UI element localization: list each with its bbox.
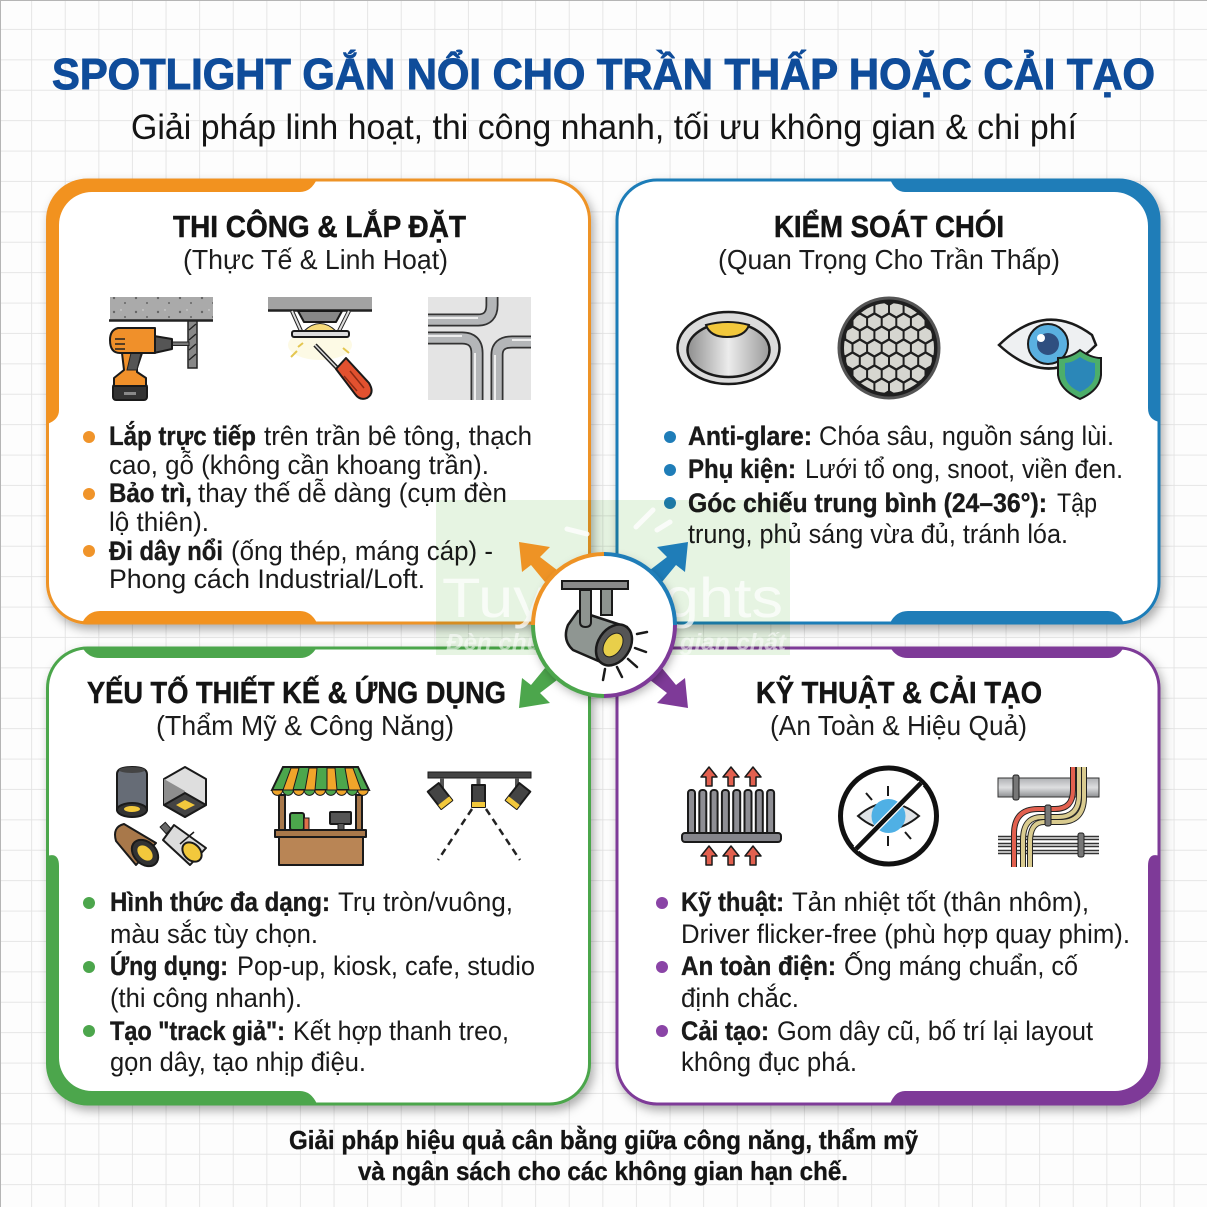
- closing statement: Giải pháp hiệu quả cân bằng giữa công năng, thẩm mỹ: [289, 1125, 918, 1155]
- closing statement: [289, 1125, 918, 1186]
- bullet: ứng dụng: (thi công nhanh).: [110, 983, 302, 1013]
- panel: yếu tố thiết kế & ứng dụng: [47, 647, 590, 1104]
- bullet: tạo track giả: Tạo "track giả":: [110, 1016, 285, 1046]
- bullet: cải tạo: Gom dây cũ, bố trí lại layout: [777, 1016, 1093, 1046]
- bullet: hình thức: màu sắc tùy chọn.: [110, 918, 318, 949]
- bullet: đi dây nổi: (ống thép, máng cáp) -: [231, 536, 493, 566]
- panel: kỹ thuật & cải tạo: [617, 647, 1160, 1104]
- subheading: an toàn: (An Toàn & Hiệu Quả): [770, 710, 1027, 741]
- bullet: phụ kiện: Lưới tổ ong, snoot, viền đen.: [805, 454, 1123, 484]
- bullet: an toàn điện: An toàn điện:: [681, 951, 836, 981]
- heading: yếu tố thiết kế: YẾU TỐ THIẾT KẾ & ỨNG DỤNG: [87, 674, 506, 710]
- bullet: phụ kiện: [664, 454, 1123, 484]
- watermark: [436, 500, 790, 655]
- bullet: kỹ thuật: Tản nhiệt tốt (thân nhôm),: [792, 887, 1089, 917]
- subheading: quan trọng: (Quan Trọng Cho Trần Thấp): [718, 244, 1060, 275]
- bullet: góc chiếu: [664, 488, 1097, 549]
- arrow: orange to top-left panel: [519, 542, 557, 582]
- bullet: lắp trực tiếp: trên trần bê tông, thạch: [264, 421, 532, 451]
- bullet: an toàn điện: Ống máng chuẩn, cố: [844, 949, 1078, 981]
- bullet: lắp trực tiếp: cao, gỗ (không cần khoang trần).: [109, 449, 489, 480]
- bullet: bảo trì: Bảo trì,: [109, 478, 192, 508]
- center badge: spotlight: [533, 554, 675, 696]
- bullet: đi dây nổi: [83, 536, 493, 594]
- icon: no flicker eye: [840, 768, 936, 864]
- arrow: blue to top-right panel: [650, 542, 688, 582]
- bullet: cải tạo: [656, 1016, 1093, 1077]
- arrow: green to bottom-left panel: [519, 668, 557, 708]
- bullet: góc chiếu: trung, phủ sáng vừa đủ, tránh lóa.: [688, 519, 1068, 549]
- bullet: anti-glare: Anti-glare:: [688, 421, 812, 451]
- bullet: kỹ thuật: Kỹ thuật:: [681, 887, 784, 917]
- subtitle: Giải pháp linh hoạt, thi công nhanh, tối ưu không gian & chi phí: [131, 108, 1077, 147]
- subheading: thẩm mỹ: (Thẩm Mỹ & Công Năng): [156, 710, 454, 741]
- bullet: tạo track giả: [83, 1016, 509, 1077]
- subheading: thực tế: (Thực Tế & Linh Hoạt): [183, 244, 448, 275]
- watermark: Tuyết Lights: [442, 566, 783, 629]
- icon: deep reflector downlight: [678, 312, 780, 384]
- watermark: Đèn chuẩn – Không gian chất: [446, 629, 787, 655]
- panel: kiểm soát chói: [617, 179, 1160, 623]
- bullet: anti-glare: Chóa sâu, nguồn sáng lùi.: [819, 421, 1114, 451]
- icon: track spotlight: [562, 581, 647, 680]
- bullet: hình thức: Trụ tròn/vuông,: [338, 887, 513, 917]
- bullet: ứng dụng: Pop-up, kiosk, cafe, studio: [237, 951, 535, 981]
- bullet: ứng dụng: [83, 950, 535, 1013]
- icon: kiosk stall: [272, 767, 369, 865]
- bullet: kỹ thuật: [656, 887, 1130, 949]
- bullet: góc chiếu: Góc chiếu trung bình (24–36°):: [688, 488, 1047, 518]
- bullet: anti-glare: [664, 421, 1114, 451]
- bullet: lắp trực tiếp: Lắp trực tiếp: [109, 420, 256, 451]
- title: SPOTLIGHT GẮN NỔI CHO TRẦN THẤP HOẶC CẢI TẠO: [52, 48, 1155, 99]
- icon: fake track with spotlights: [428, 772, 531, 860]
- icon: organised cables: [998, 767, 1099, 867]
- icon: honeycomb grille: [839, 298, 939, 398]
- bullet: đi dây nổi: Phong cách Industrial/Loft.: [109, 564, 425, 594]
- bullet: hình thức: [83, 887, 513, 949]
- bullet: cải tạo: không đục phá.: [681, 1047, 857, 1077]
- closing statement: và ngân sách cho các không gian hạn chế.: [358, 1156, 848, 1186]
- heading: thi công: THI CÔNG & LẮP ĐẶT: [173, 208, 466, 244]
- arrow: purple to bottom-right panel: [650, 668, 688, 708]
- heading: kỹ thuật: KỸ THUẬT & CẢI TẠO: [756, 674, 1042, 710]
- bullet: bảo trì: thay thế dễ dàng (cụm đèn: [198, 477, 507, 508]
- bullet: ứng dụng: Ứng dụng:: [110, 950, 228, 981]
- bullet: bảo trì: [83, 477, 507, 537]
- bullet: phụ kiện: Phụ kiện:: [688, 454, 796, 484]
- heading: kiểm soát chói: KIỂM SOÁT CHÓI: [774, 208, 1004, 244]
- bullet: tạo track giả: Kết hợp thanh treo,: [293, 1016, 509, 1046]
- bullet: hình thức: Hình thức đa dạng:: [110, 887, 330, 917]
- icon: heatsink with arrows: [682, 767, 781, 865]
- bullet: an toàn điện: định chắc.: [681, 982, 799, 1013]
- bullet: cải tạo: Cải tạo:: [681, 1016, 769, 1046]
- bullet: an toàn điện: [656, 949, 1078, 1013]
- icon: drill on concrete ceiling: [109, 297, 213, 400]
- icon: surface conduit pipes: [428, 297, 531, 400]
- icon: spotlight body shapes: [115, 767, 206, 871]
- bullet: góc chiếu: Tập: [1057, 488, 1097, 518]
- bullet: lắp trực tiếp: [83, 420, 532, 480]
- bullet: tạo track giả: gọn dây, tạo nhịp điệu.: [110, 1047, 366, 1077]
- bullet: bảo trì: lộ thiên).: [109, 507, 209, 537]
- icon: fixture with screwdriver: [268, 297, 372, 399]
- panel: thi công & lắp đặt: [47, 179, 590, 623]
- bullet: đi dây nổi: Đi dây nổi: [109, 536, 223, 566]
- icon: eye with shield: [999, 320, 1101, 399]
- bullet: kỹ thuật: Driver flicker-free (phù hợp quay phim).: [681, 919, 1130, 949]
